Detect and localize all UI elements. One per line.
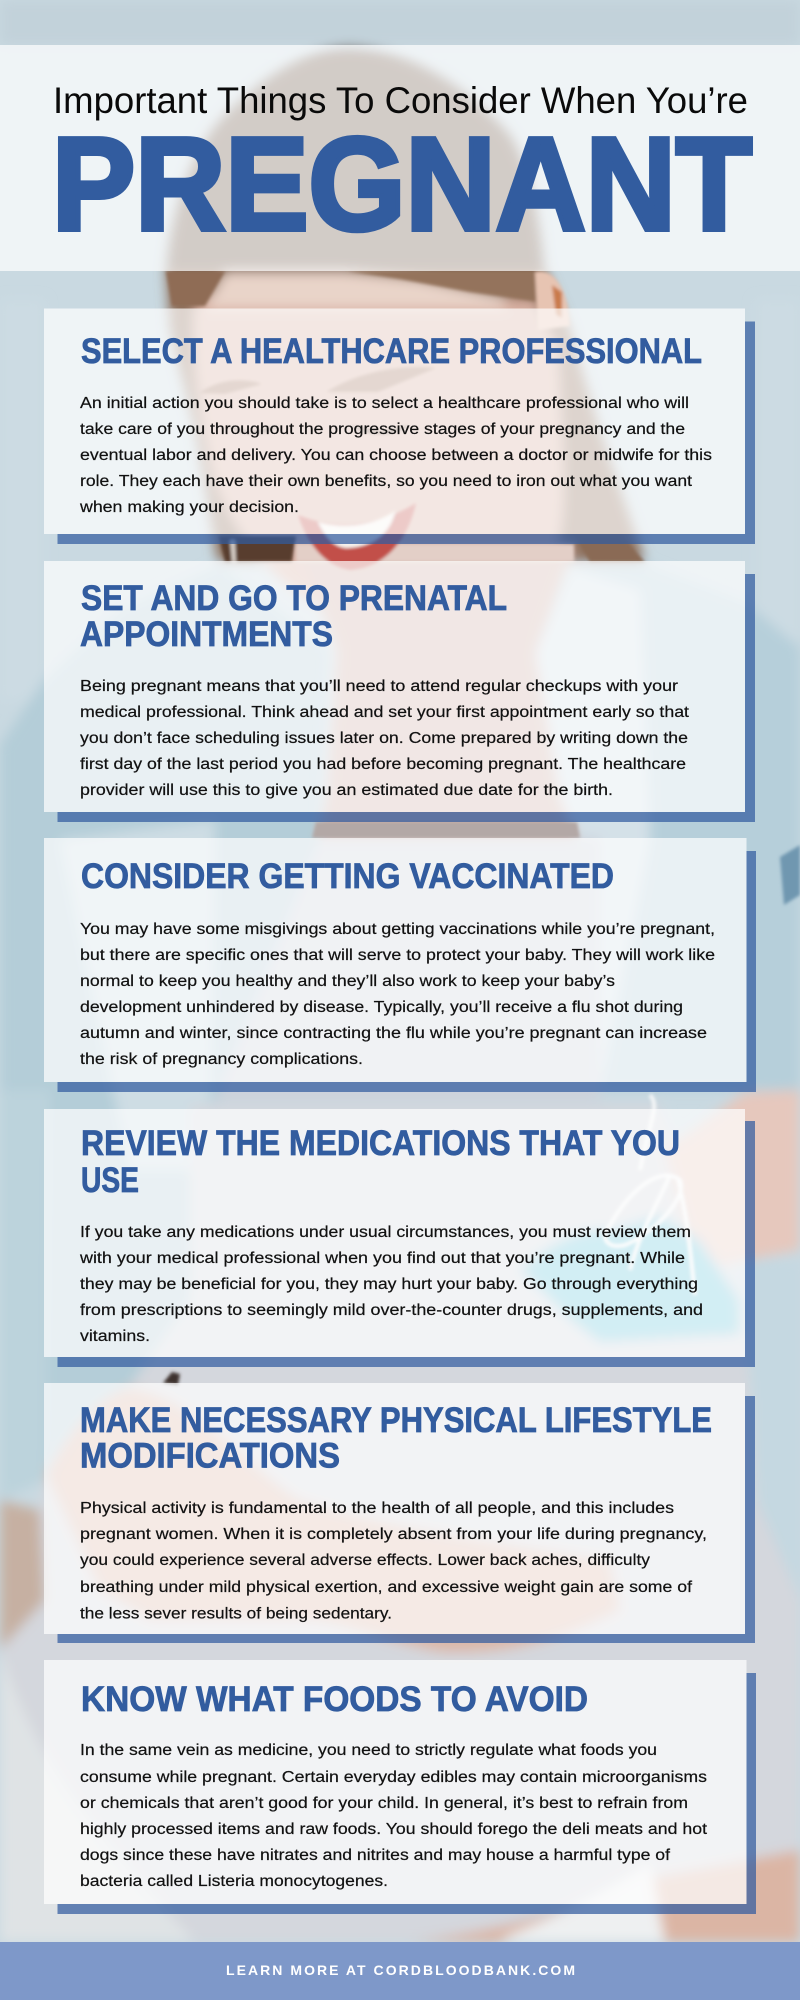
heading: USE [81,1161,139,1200]
body text: consume while pregnant. Certain everyday edibles may contain microorganisms [80,1769,707,1786]
body text: pregnant women. When it is completely absent from your life during pregnancy, [80,1526,707,1543]
body text: take care of you throughout the progressive stages of your pregnancy and the [80,421,685,438]
footer bar [0,1942,800,2000]
panel: consider getting vaccinated [44,838,756,1092]
body text: you could experience several adverse effects. Lower back aches, difficulty [80,1552,650,1569]
heading [81,1124,680,1200]
body text [79,1224,703,1345]
body text: or chemicals that aren’t good for your child. In general, it’s best to refrain from [80,1795,688,1812]
heading: MODIFICATIONS [80,1436,340,1476]
heading: CONSIDER GETTING VACCINATED [81,857,614,896]
body text: An initial action you should take is to select a healthcare professional who will [80,395,689,412]
heading: SELECT A HEALTHCARE PROFESSIONAL [81,332,702,371]
body text: If you take any medications under usual circumstances, you must review them [80,1224,691,1241]
body text [79,395,712,516]
heading [80,1401,712,1476]
body text: bacteria called Listeria monocytogenes. [80,1873,388,1890]
body text: they may be beneficial for you, they may hurt your baby. Go through everything [80,1276,698,1293]
header band [0,45,800,271]
body text: highly processed items and raw foods. You should forego the deli meats and hot [80,1821,708,1838]
heading [80,579,507,654]
body text: autumn and winter, since contracting the flu while you’re pregnant can increase [80,1025,707,1042]
body text [80,678,690,799]
heading: APPOINTMENTS [80,615,333,654]
heading: MAKE NECESSARY PHYSICAL LIFESTYLE [80,1401,712,1440]
body text [80,1742,708,1890]
heading: SET AND GO TO PRENATAL [81,579,507,618]
body text: provider will use this to give you an estimated due date for the birth. [80,782,613,799]
body text: breathing under mild physical exertion, and excessive weight gain are some of [80,1579,693,1596]
body text: first day of the last period you had before becoming pregnant. The healthcare [80,756,686,773]
body text: but there are specific ones that will serve to protect your baby. They will work like [80,947,715,964]
body text: role. They each have their own benefits, so you need to iron out what you want [80,473,693,490]
header subtitle: Important Things To Consider When You’re [53,80,748,121]
body text: You may have some misgivings about getting vaccinations while you’re pregnant, [80,921,715,938]
body text: with your medical professional when you find out that you’re pregnant. While [79,1250,685,1267]
body text: vitamins. [80,1328,150,1345]
body text: eventual labor and delivery. You can choose between a doctor or midwife for this [80,447,712,464]
panel: make necessary physical lifestyle modifications [44,1383,755,1643]
body text: from prescriptions to seemingly mild over-the-counter drugs, supplements, and [80,1302,703,1319]
footer text: LEARN MORE AT CORDBLOODBANK.COM [226,1962,575,1978]
body text: the less sever results of being sedentary. [80,1606,392,1622]
panel: review the medications that you use [44,1109,755,1367]
panel: set and go to prenatal appointments [44,561,755,822]
heading: REVIEW THE MEDICATIONS THAT YOU [81,1124,680,1163]
body text: you don’t face scheduling issues later on. Come prepared by writing down the [80,730,688,747]
body text: medical professional. Think ahead and set your first appointment early so that [80,704,690,721]
body text [80,921,715,1068]
body text: normal to keep you healthy and they’ll also work to keep your baby’s [80,973,615,990]
body text: development unhindered by disease. Typically, you’ll receive a flu shot during [80,999,683,1016]
panel: know what foods to avoid [44,1660,756,1914]
body text: the risk of pregnancy complications. [80,1051,363,1068]
panel: select a healthcare professional [44,308,755,544]
header title: PREGNANT: PREGNANT [52,110,752,258]
body text: dogs since these have nitrates and nitrites and may house a harmful type of [80,1847,671,1864]
body text: when making your decision. [79,499,299,516]
body text [80,1500,707,1622]
heading: KNOW WHAT FOODS TO AVOID [81,1680,588,1719]
body text: In the same vein as medicine, you need to strictly regulate what foods you [80,1742,657,1759]
body text: Physical activity is fundamental to the health of all people, and this includes [80,1500,674,1517]
body text: Being pregnant means that you’ll need to attend regular checkups with your [80,678,678,695]
